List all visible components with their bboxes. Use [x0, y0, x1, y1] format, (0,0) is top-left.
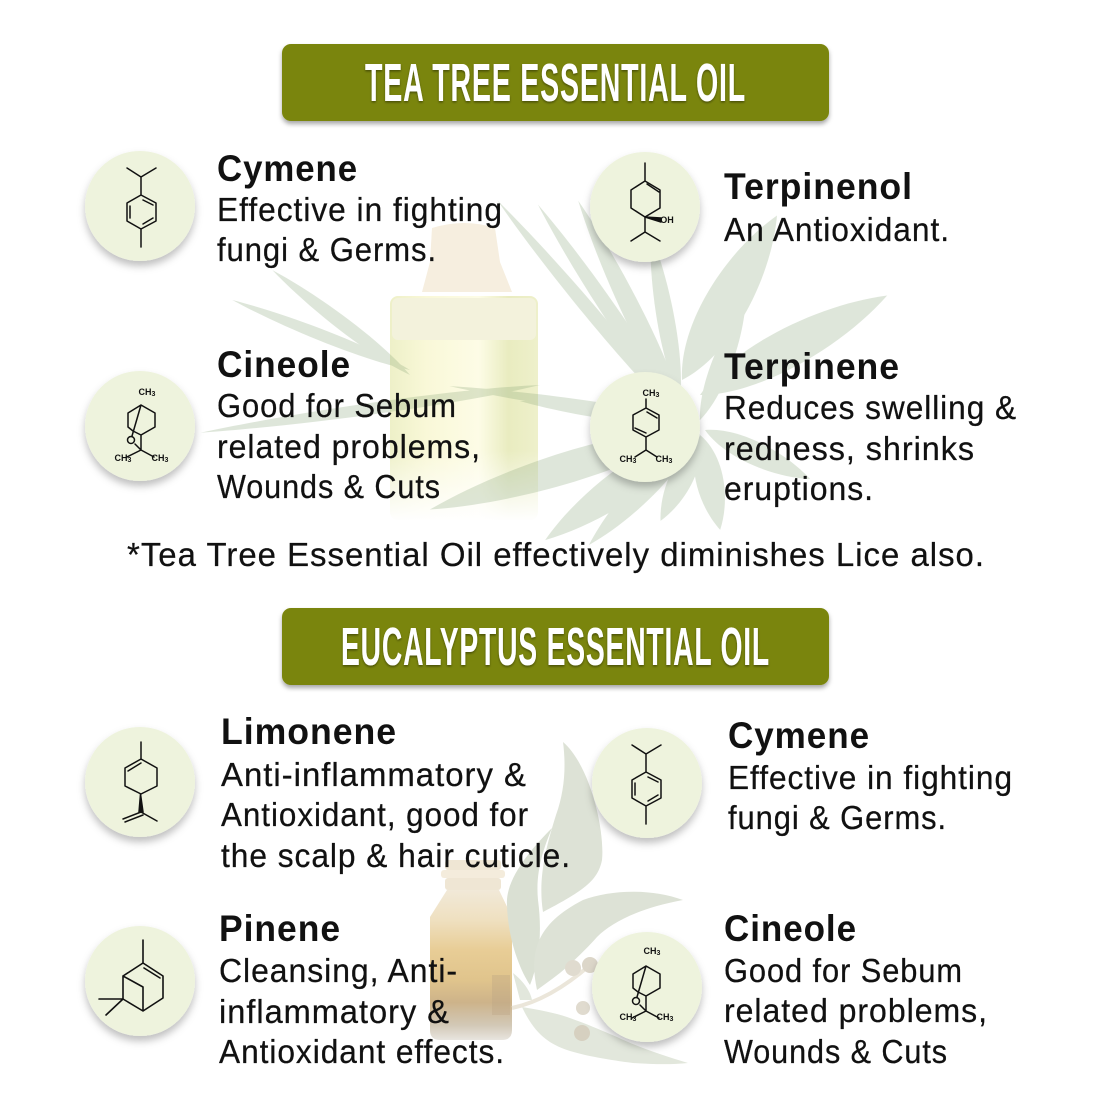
icon: cineole molecule: 3	[165, 457, 169, 464]
item: Pinene: Antioxidant effects.	[219, 1033, 505, 1070]
item: Cineole (eucalyptus): Cineole	[724, 908, 857, 949]
icon: cineole molecule: 3	[152, 391, 156, 398]
icon: cymene molecule	[592, 728, 702, 838]
icon: cineole molecule: 3	[670, 1016, 674, 1023]
icon: cineole molecule: CH	[139, 387, 152, 397]
item: Cineole (eucalyptus)	[592, 908, 988, 1070]
heading banner: eucalyptus essential oil	[282, 608, 829, 685]
icon: cineole molecule: CH	[115, 453, 128, 463]
icon: cineole molecule: 3	[633, 1016, 637, 1023]
icon: terpinene molecule: CH	[656, 454, 669, 464]
icon: terpinene molecule: CH	[643, 388, 656, 398]
item: Limonene: the scalp & hair cuticle.	[221, 837, 571, 874]
item: Cineole: Cineole	[217, 344, 351, 385]
footnote: *Tea Tree Essential Oil effectively diminishes Lice also.	[127, 536, 985, 573]
item: Cineole: related problems,	[217, 428, 481, 465]
item: Cymene	[85, 148, 503, 268]
item: Cineole (eucalyptus): related problems,	[724, 992, 988, 1029]
item: Cineole (eucalyptus): Good for Sebum	[724, 952, 963, 989]
heading banner: tea tree essential oil: TEA TREE ESSENTIAL OIL	[365, 53, 746, 113]
icon: terpinene molecule	[590, 372, 700, 482]
icon: cineole molecule: CH	[657, 1012, 670, 1022]
item: Limonene: Anti-inflammatory &	[221, 756, 527, 793]
icon: cineole molecule: CH	[644, 946, 657, 956]
item: Pinene: Cleansing, Anti-	[219, 952, 458, 989]
item: Cymene (eucalyptus): fungi & Germs.	[728, 799, 947, 836]
item: Pinene	[85, 908, 505, 1070]
icon: terpinene molecule: CH	[620, 454, 633, 464]
item: Limonene: Limonene	[221, 711, 397, 752]
icon: cineole molecule	[592, 932, 702, 1042]
icon: terpinene molecule: 3	[669, 458, 673, 465]
icon: cineole molecule: CH	[620, 1012, 633, 1022]
item: Limonene	[85, 711, 571, 874]
item: Terpinene: redness, shrinks	[724, 430, 975, 467]
item: Limonene: Antioxidant, good for	[221, 796, 529, 833]
icon: limonene molecule	[85, 727, 195, 837]
item: Cineole	[85, 344, 481, 505]
background image: tea tree bottle	[385, 223, 545, 522]
item: Cineole (eucalyptus): Wounds & Cuts	[724, 1033, 948, 1070]
item: Terpinene	[590, 346, 1017, 507]
item: Cineole: Wounds & Cuts	[217, 468, 441, 505]
icon: cymene molecule	[85, 151, 195, 261]
item: Cymene: Effective in fighting	[217, 191, 503, 228]
item: Cymene (eucalyptus): Effective in fighting	[728, 759, 1013, 796]
item: Cineole: Good for Sebum	[217, 387, 457, 424]
background image: eucalyptus bottle	[430, 860, 512, 1040]
background image: tea tree leaves	[200, 196, 896, 554]
item: Cymene: fungi & Germs.	[217, 231, 437, 268]
item: Terpinene: eruptions.	[724, 470, 874, 507]
icon: cineole molecule	[85, 371, 195, 481]
item: Cymene (eucalyptus)	[592, 715, 1013, 838]
icon: terpinene molecule: 3	[633, 458, 637, 465]
item: Terpinene: Terpinene	[724, 346, 900, 387]
item: Cymene: Cymene	[217, 148, 358, 189]
icon: terpinenol molecule	[590, 152, 700, 262]
icon: terpinene molecule: 3	[656, 392, 660, 399]
item: Terpinenol: An Antioxidant.	[724, 211, 950, 248]
background image: eucalyptus leaves	[507, 742, 688, 1064]
icon: cineole molecule: 3	[128, 457, 132, 464]
icon: cineole molecule: CH	[152, 453, 165, 463]
item: Cymene (eucalyptus): Cymene	[728, 715, 870, 756]
icon: cineole molecule: 3	[657, 950, 661, 957]
item: Pinene: inflammatory &	[219, 993, 450, 1030]
icon: terpinenol molecule: OH	[660, 215, 674, 225]
item: Terpinene: Reduces swelling &	[724, 389, 1017, 426]
item: Terpinenol	[590, 152, 950, 262]
heading banner: tea tree essential oil	[282, 44, 829, 121]
item: Pinene: Pinene	[219, 908, 341, 949]
icon: pinene molecule	[85, 926, 195, 1036]
item: Terpinenol: Terpinenol	[724, 166, 913, 207]
